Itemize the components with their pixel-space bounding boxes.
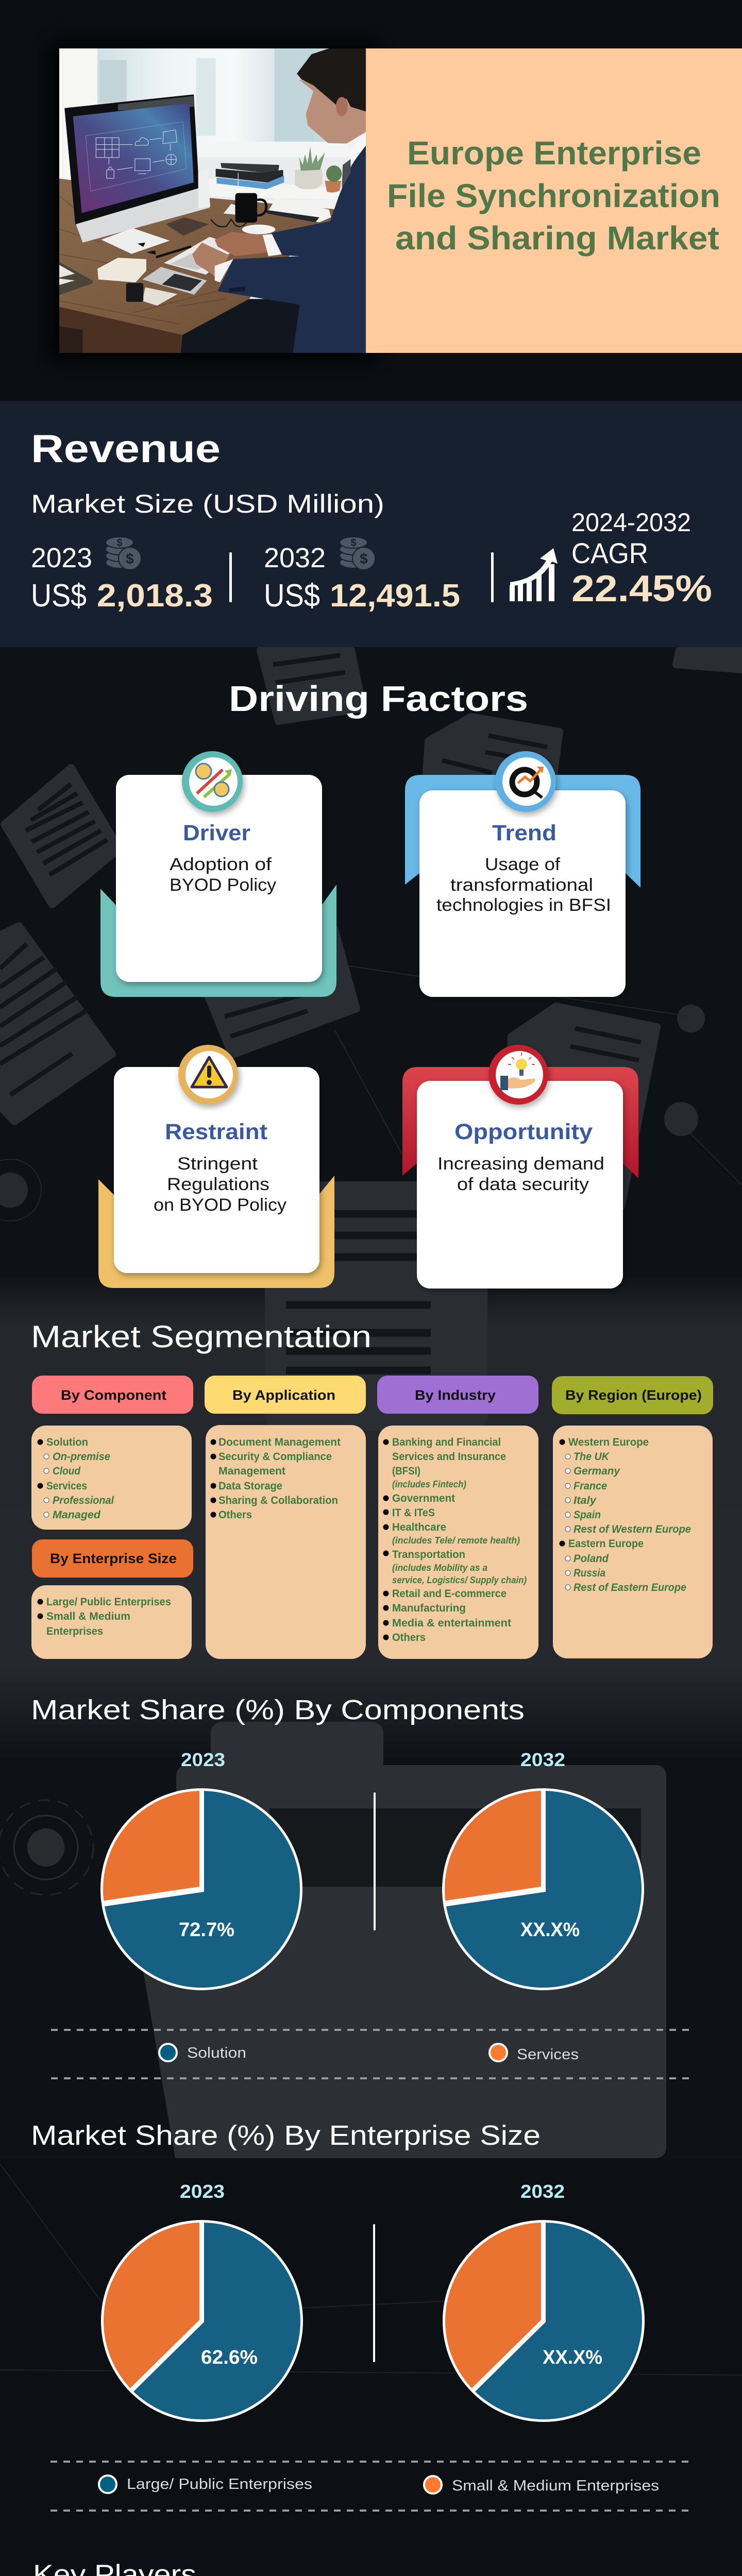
pie chart: components 2032: 2032 xyxy=(520,1749,565,1770)
card: restraint xyxy=(98,1045,334,1288)
driver description xyxy=(170,855,276,895)
list: industry items: Banking and Financial xyxy=(392,1436,501,1448)
CAGR: 2024-2032 xyxy=(571,508,691,537)
list: region items: Rest of Eastern Europe xyxy=(574,1582,686,1594)
panel: by component: By Component xyxy=(61,1387,166,1403)
list: application items: Security & Compliance xyxy=(218,1451,332,1463)
list: application items: Sharing & Collaboration xyxy=(218,1495,338,1506)
icon: coins 2023: $ xyxy=(126,551,134,567)
hero photo: man working at desktop computer xyxy=(59,48,366,353)
pie chart: enterprise size 2023 xyxy=(101,2184,303,2422)
list: industry items: Healthcare xyxy=(392,1521,446,1533)
CAGR xyxy=(571,508,712,609)
list: region items: The UK xyxy=(574,1451,610,1463)
main title: and Sharing Market xyxy=(395,219,719,257)
panel: by component xyxy=(31,1376,193,1530)
card: trend xyxy=(405,751,640,997)
list: industry items: Services and Insurance xyxy=(392,1451,506,1463)
pie chart: components 2023: 72.7% xyxy=(179,1919,234,1941)
icon: coins 2032: $ xyxy=(360,551,368,567)
panel: by enterprise size: By Enterprise Size xyxy=(50,1551,177,1566)
list: industry items: Transportation xyxy=(392,1549,465,1561)
pie chart: components 2032: XX.X% xyxy=(520,1919,580,1941)
list: industry items: (includes Mobility as a xyxy=(392,1563,487,1573)
market size label: Market Size (USD Million) xyxy=(31,489,384,518)
icon: bulb and hand xyxy=(488,1045,548,1105)
list: industry items: service, Logistics/ Supply chain) xyxy=(392,1575,527,1585)
panel: by industry xyxy=(377,1376,538,1659)
driver description: BYOD Policy xyxy=(170,875,276,895)
panel: by application xyxy=(205,1376,366,1659)
legend: enterprise size: Large/ Public Enterprises xyxy=(127,2476,312,2493)
heading: market share by enterprise size: Market Share (%) By Enterprise Size xyxy=(31,2120,541,2151)
list: application items: Management xyxy=(218,1465,285,1477)
list: enterprise size items: Large/ Public Enterprises xyxy=(46,1596,171,1608)
opportunity description: of data security xyxy=(457,1175,589,1194)
main title xyxy=(387,134,720,257)
list: component items: On-premise xyxy=(53,1451,110,1463)
icon: warning triangle xyxy=(178,1045,238,1105)
pie chart: enterprise size 2023: 62.6% xyxy=(201,2347,258,2368)
pie chart: components 2032 xyxy=(442,1753,644,1990)
list: application items: Data Storage xyxy=(218,1480,282,1492)
list: component items: Professional xyxy=(53,1495,114,1506)
main title: File Synchronization xyxy=(387,177,720,214)
list: region items: France xyxy=(574,1480,607,1492)
list: component items: Cloud xyxy=(53,1465,81,1477)
list: region items: Germany xyxy=(574,1465,620,1477)
list: enterprise size items: Small & Medium xyxy=(46,1611,130,1622)
legend: components: Solution xyxy=(187,2045,246,2061)
restraint description: Regulations xyxy=(167,1175,269,1194)
legend: enterprise size: Small & Medium Enterprises xyxy=(452,2478,659,2494)
list: region items xyxy=(553,1426,713,1658)
legend: enterprise size xyxy=(99,2476,659,2494)
list: industry items: Others xyxy=(392,1632,426,1643)
list: region items: Western Europe xyxy=(568,1436,649,1448)
list: industry items xyxy=(378,1426,538,1659)
trend description: transformational xyxy=(450,875,593,895)
card: opportunity: Opportunity xyxy=(454,1120,593,1144)
icon: trend magnifier xyxy=(495,751,556,812)
card: opportunity xyxy=(402,1045,638,1289)
panel: by region: By Region (Europe) xyxy=(565,1387,702,1403)
restraint description: Stringent xyxy=(177,1154,258,1174)
revenue band xyxy=(0,401,742,647)
panel: by application: By Application xyxy=(232,1387,335,1403)
list: region items: Eastern Europe xyxy=(568,1538,644,1550)
hero panel xyxy=(49,41,742,361)
legend: components: Services xyxy=(517,2046,579,2063)
list: region items: Rest of Western Europe xyxy=(574,1523,691,1535)
list: region items: Russia xyxy=(574,1567,605,1579)
card: trend: Trend xyxy=(492,821,556,845)
list: industry items: (includes Tele/ remote health) xyxy=(392,1535,520,1546)
list: region items: Spain xyxy=(574,1509,601,1521)
icon: coins 2032 xyxy=(340,537,375,570)
icon: coins 2023: $ xyxy=(116,537,123,549)
pie chart: enterprise size 2023: 2023 xyxy=(180,2181,225,2202)
heading: market segmentation: Market Segmentation xyxy=(31,1319,372,1354)
pie chart: enterprise size 2032: XX.X% xyxy=(543,2347,602,2368)
list: application items xyxy=(206,1425,366,1659)
2032 value: 12,491.5 xyxy=(330,578,460,614)
pie chart: enterprise size 2032 xyxy=(443,2184,645,2422)
list: enterprise size items: Enterprises xyxy=(46,1625,103,1637)
list: component items: Managed xyxy=(53,1509,101,1521)
restraint description xyxy=(154,1154,286,1215)
list: industry items: Media & entertainment xyxy=(392,1617,511,1629)
list: industry items: (includes Fintech) xyxy=(392,1479,466,1489)
CAGR: CAGR xyxy=(571,537,648,569)
list: industry items: (BFSI) xyxy=(392,1465,420,1477)
list: region items: Poland xyxy=(574,1553,609,1565)
list: industry items: IT & ITeS xyxy=(392,1507,435,1519)
panel: by industry: By Industry xyxy=(415,1387,496,1403)
icon: coins 2023 xyxy=(106,537,141,570)
title panel xyxy=(366,48,742,353)
heading: driving factors: Driving Factors xyxy=(229,679,528,719)
legend: components xyxy=(159,2044,579,2063)
list: component items xyxy=(31,1426,192,1530)
2023 value: 2,018.3 xyxy=(97,578,213,614)
heading: market share by components: Market Share (%) By Components xyxy=(31,1694,525,1725)
CAGR: 22.45% xyxy=(571,568,712,609)
main title: Europe Enterprise xyxy=(407,134,701,172)
revenue heading: Revenue xyxy=(31,427,221,471)
pie chart: enterprise size 2032: 2032 xyxy=(520,2181,565,2202)
icon: growth chart arrow xyxy=(510,548,558,601)
driver description: Adoption of xyxy=(170,855,272,874)
list: industry items: Government xyxy=(392,1493,455,1504)
panel: by enterprise size xyxy=(31,1539,193,1659)
opportunity description xyxy=(437,1154,604,1194)
2032 value: US$ xyxy=(264,578,320,614)
list: industry items: Manufacturing xyxy=(392,1602,466,1614)
list: component items: Solution xyxy=(46,1436,88,1448)
list: application items: Document Management xyxy=(218,1436,341,1448)
2023 value xyxy=(31,543,213,614)
icon: coins 2032: $ xyxy=(350,537,357,549)
list: region items: Italy xyxy=(574,1495,597,1506)
card: driver xyxy=(100,751,336,997)
list: industry items: Retail and E-commerce xyxy=(392,1588,507,1600)
pie chart: components 2023 xyxy=(100,1753,302,1990)
2023 value: 2023 xyxy=(31,543,92,573)
opportunity description: Increasing demand xyxy=(437,1154,604,1174)
panel: by region xyxy=(552,1376,713,1658)
2032 value xyxy=(264,543,460,614)
trend description: technologies in BFSI xyxy=(436,895,611,915)
card: driver: Driver xyxy=(183,821,250,845)
restraint description: on BYOD Policy xyxy=(154,1195,286,1215)
icon: driver arrows and gears xyxy=(182,751,243,812)
list: enterprise size items xyxy=(31,1585,192,1659)
list: component items: Services xyxy=(46,1480,87,1492)
card: restraint: Restraint xyxy=(165,1120,267,1144)
trend description: Usage of xyxy=(485,855,561,874)
2032 value: 2032 xyxy=(264,543,326,573)
list: application items: Others xyxy=(218,1509,252,1521)
2023 value: US$ xyxy=(31,578,87,614)
trend description xyxy=(436,855,611,915)
pie chart: components 2023: 2023 xyxy=(181,1749,225,1770)
